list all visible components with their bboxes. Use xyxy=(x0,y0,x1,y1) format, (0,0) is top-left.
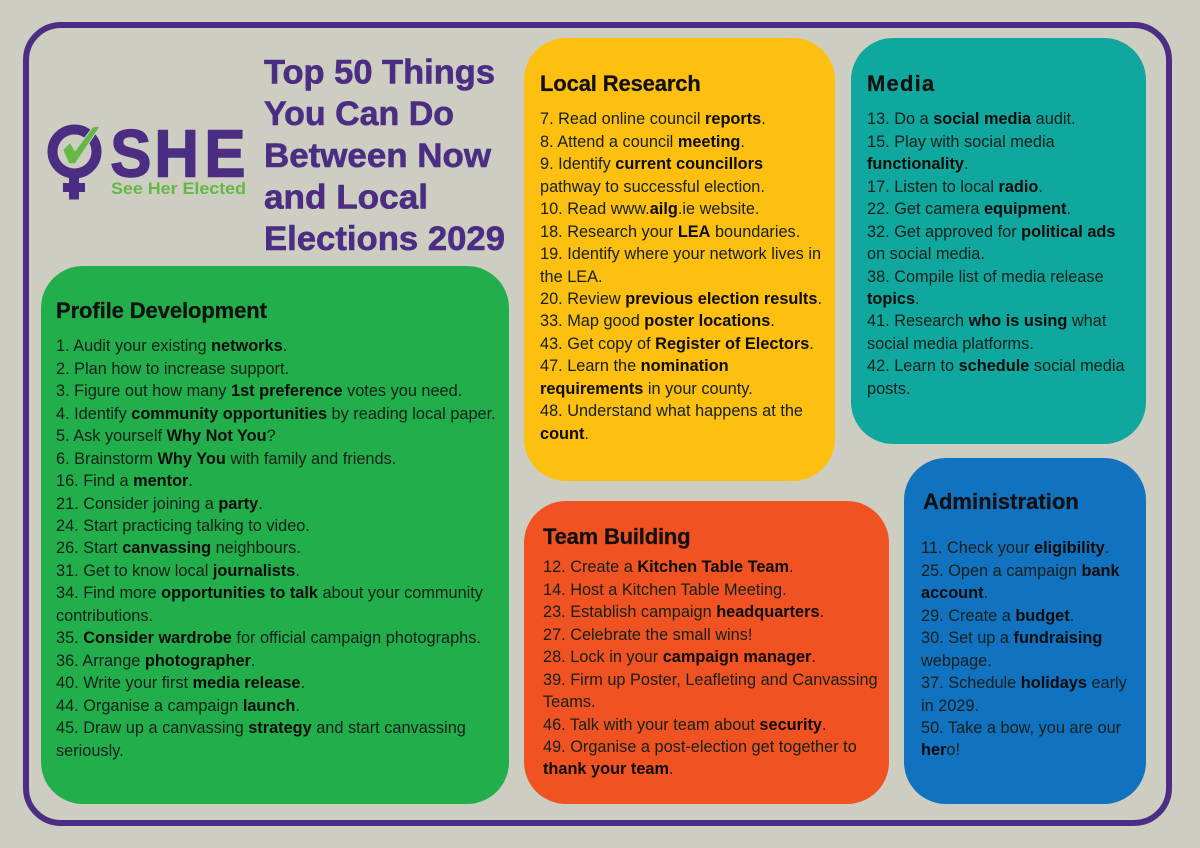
list: media: 32. Get approved for political ads xyxy=(867,223,1115,241)
icon: female symbol with check xyxy=(52,127,99,200)
list: local research: 47. Learn the nomination xyxy=(540,357,729,375)
logo wordmark: SHE xyxy=(110,118,246,191)
list: local research: 18. Research your LEA boundaries. xyxy=(540,223,800,241)
title: Elections 2029 xyxy=(264,220,505,258)
title: Between Now xyxy=(264,137,492,175)
list: local research: 10. Read www.ailg.ie website. xyxy=(540,200,759,218)
list: profile development: contributions. xyxy=(56,607,153,625)
list: media: on social media. xyxy=(867,245,985,263)
list: local research xyxy=(540,110,822,443)
heading: team building: Team Building xyxy=(543,524,690,549)
list: media: functionality. xyxy=(867,155,969,173)
heading: profile development: Profile Development xyxy=(56,298,267,323)
list: administration xyxy=(921,539,1127,759)
list: profile development: 16. Find a mentor. xyxy=(56,472,193,490)
list: administration: 29. Create a budget. xyxy=(921,607,1074,625)
list: administration: in 2029. xyxy=(921,697,979,715)
list: local research: count. xyxy=(540,425,589,443)
list: administration: webpage. xyxy=(921,652,992,670)
list: profile development xyxy=(56,337,496,760)
list: profile development: 1. Audit your existing networks. xyxy=(56,337,287,355)
heading: media: Media xyxy=(867,71,935,96)
list: administration: 37. Schedule holidays early xyxy=(921,674,1127,692)
list: media: 42. Learn to schedule social media xyxy=(867,357,1125,375)
list: media: 38. Compile list of media release xyxy=(867,268,1104,286)
panel: administration xyxy=(904,458,1146,804)
title: You Can Do xyxy=(264,95,454,133)
list: profile development: 44. Organise a campaign launch. xyxy=(56,697,300,715)
panel: profile development xyxy=(41,266,509,804)
list: profile development: 45. Draw up a canvassing strategy and start canvassing xyxy=(56,719,466,737)
panel: team building xyxy=(524,501,889,804)
list: team building: 12. Create a Kitchen Table Team. xyxy=(543,558,794,576)
list: profile development: 24. Start practicing talking to video. xyxy=(56,517,310,535)
list: profile development: 31. Get to know local journalists. xyxy=(56,562,300,580)
list: team building: 46. Talk with your team about security. xyxy=(543,716,827,734)
list: media xyxy=(867,110,1125,398)
list: media: topics. xyxy=(867,290,920,308)
list: administration: 50. Take a bow, you are our xyxy=(921,719,1121,737)
list: team building: 14. Host a Kitchen Table Meeting. xyxy=(543,581,787,599)
panel: media xyxy=(851,38,1146,444)
list: local research: 9. Identify current councillors xyxy=(540,155,763,173)
list: profile development: 34. Find more opportunities to talk about your community xyxy=(56,584,483,602)
list: profile development: 21. Consider joining a party. xyxy=(56,495,263,513)
list: local research: 8. Attend a council meeting. xyxy=(540,133,745,151)
list: administration: account. xyxy=(921,584,988,602)
list: local research: the LEA. xyxy=(540,268,603,286)
title: and Local xyxy=(264,178,428,216)
list: profile development: seriously. xyxy=(56,742,124,760)
list: team building: 39. Firm up Poster, Leafleting and Canvassing xyxy=(543,671,878,689)
logo tagline: See Her Elected xyxy=(111,179,246,198)
list: media: posts. xyxy=(867,380,911,398)
list: team building: thank your team. xyxy=(543,760,674,778)
heading: administration: Administration xyxy=(923,489,1079,514)
list: local research: 43. Get copy of Register of Electors. xyxy=(540,335,814,353)
list: local research: 48. Understand what happens at the xyxy=(540,402,803,420)
list: media: 22. Get camera equipment. xyxy=(867,200,1071,218)
title xyxy=(264,54,505,258)
list: team building: 27. Celebrate the small wins! xyxy=(543,626,752,644)
list: team building xyxy=(543,558,878,778)
panel: local research xyxy=(524,38,835,481)
list: media: social media platforms. xyxy=(867,335,1034,353)
list: local research: 19. Identify where your network lives in xyxy=(540,245,821,263)
list: team building: Teams. xyxy=(543,693,596,711)
list: local research: 7. Read online council reports. xyxy=(540,110,766,128)
heading: local research: Local Research xyxy=(540,71,701,96)
list: profile development: 3. Figure out how many 1st preference votes you need. xyxy=(56,382,462,400)
list: profile development: 36. Arrange photographer. xyxy=(56,652,255,670)
list: profile development: 4. Identify community opportunities by reading local paper. xyxy=(56,405,496,423)
logo: SHE See Her Elected xyxy=(48,118,246,200)
list: media: 41. Research who is using what xyxy=(867,312,1106,330)
list: administration: 30. Set up a fundraising xyxy=(921,629,1102,647)
list: administration: hero! xyxy=(921,741,960,759)
list: team building: 28. Lock in your campaign manager. xyxy=(543,648,816,666)
list: profile development: 35. Consider wardrobe for official campaign photographs. xyxy=(56,629,481,647)
list: local research: 33. Map good poster locations. xyxy=(540,312,775,330)
list: local research: pathway to successful election. xyxy=(540,178,765,196)
list: profile development: 26. Start canvassing neighbours. xyxy=(56,539,301,557)
title: Top 50 Things xyxy=(264,54,495,92)
list: profile development: 5. Ask yourself Why Not You? xyxy=(56,427,276,445)
list: local research: 20. Review previous election results. xyxy=(540,290,822,308)
list: media: 13. Do a social media audit. xyxy=(867,110,1076,128)
list: profile development: 6. Brainstorm Why You with family and friends. xyxy=(56,450,396,468)
list: profile development: 2. Plan how to increase support. xyxy=(56,360,289,378)
list: team building: 23. Establish campaign headquarters. xyxy=(543,603,824,621)
list: local research: requirements in your county. xyxy=(540,380,753,398)
list: media: 17. Listen to local radio. xyxy=(867,178,1043,196)
list: team building: 49. Organise a post-election get together to xyxy=(543,738,857,756)
list: media: 15. Play with social media xyxy=(867,133,1055,151)
list: profile development: 40. Write your first media release. xyxy=(56,674,305,692)
list: administration: 11. Check your eligibility. xyxy=(921,539,1109,557)
list: administration: 25. Open a campaign bank xyxy=(921,562,1120,580)
